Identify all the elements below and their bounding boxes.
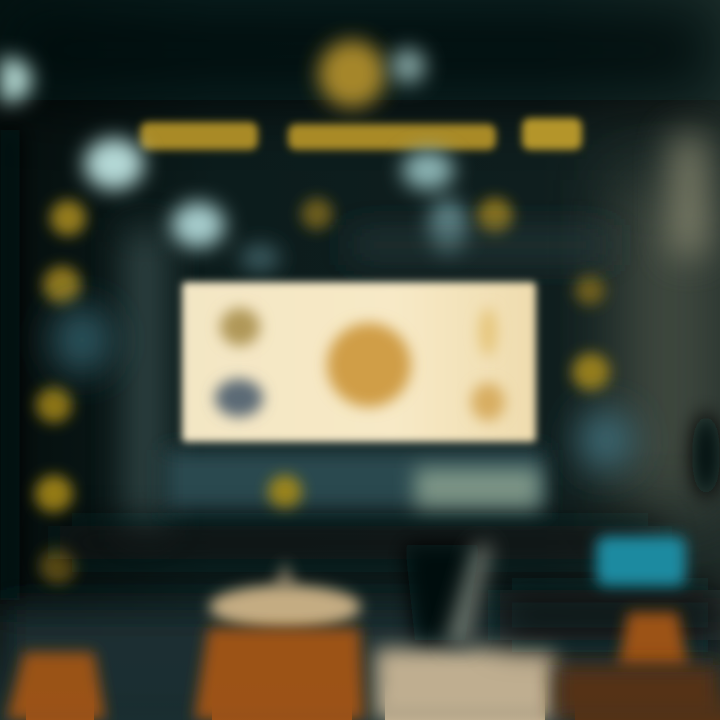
- screen right marks: [479, 308, 497, 356]
- title bar: [140, 118, 582, 150]
- foreground orange objects: [6, 560, 720, 720]
- left and top yellow icons: [35, 198, 610, 584]
- lower yellow icon: [268, 475, 302, 509]
- lower desk and monitor stand: [0, 413, 720, 720]
- pale blue bubbles: [0, 58, 468, 272]
- screen centre coin: [327, 323, 411, 407]
- main screen: [165, 282, 545, 512]
- screen left icon: gold: [220, 308, 260, 346]
- side blue panels: [52, 235, 634, 470]
- screen left icon: blue: [215, 379, 263, 417]
- title icon: gold coin: [318, 40, 426, 108]
- blue button: [596, 536, 686, 586]
